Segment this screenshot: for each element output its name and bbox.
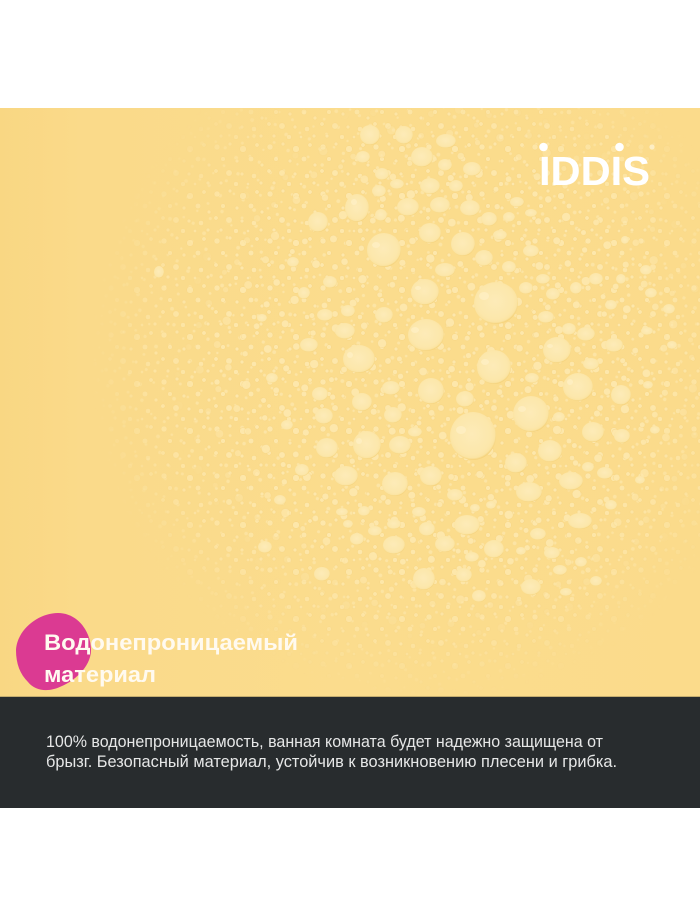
dark description band — [0, 696, 700, 808]
heading — [44, 630, 298, 687]
description text — [46, 733, 617, 771]
logo: IDDIS: IDDIS — [539, 148, 650, 194]
heading: материал — [44, 662, 156, 687]
yellow photo panel: water drops on fabric — [0, 108, 700, 697]
droplet highlights — [347, 199, 573, 444]
pink accent blob — [16, 613, 91, 690]
description text: брызг. Безопасный материал, устойчив к возникновению плесени и грибка. — [46, 753, 617, 771]
water droplets — [154, 125, 677, 602]
infographic canvas — [0, 108, 700, 808]
heading: Водонепроницаемый — [44, 630, 298, 655]
description text: 100% водонепроницаемость, ванная комната будет надежно защищена от — [46, 733, 603, 751]
